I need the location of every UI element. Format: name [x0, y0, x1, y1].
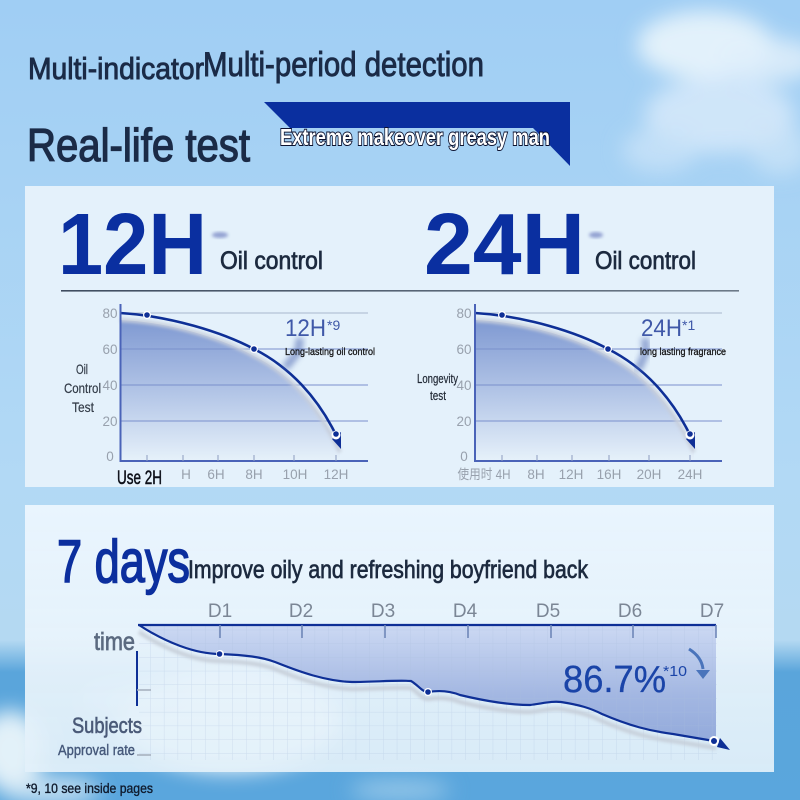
label: longevity test: test: [430, 388, 446, 403]
heading: multi-period detection: Multi-period detection: [203, 46, 484, 84]
chart: oil control test: H: [181, 467, 191, 482]
chart: longevity test: *1: [682, 317, 695, 333]
chart: seven day approval: D4: [453, 601, 478, 622]
stat: 24H oil control: [424, 196, 696, 293]
chart: longevity test: 60: [456, 342, 472, 357]
chart: longevity test: 80: [456, 306, 472, 321]
chart: longevity test: 使用时 4H: [458, 466, 510, 482]
stat: 7 days: 7 days: [57, 528, 190, 595]
subheading: improve oily: Improve oily and refreshing boyfriend back: [188, 556, 588, 584]
banner: extreme makeover: [264, 102, 570, 166]
chart: oil control test: 10H: [283, 467, 307, 482]
chart: oil control test: 40: [102, 378, 118, 393]
chart: longevity test: long lasting fragrance: [640, 346, 726, 358]
label: oil control test: Oil: [76, 361, 88, 377]
stat: 24H oil control: 24H: [424, 196, 585, 293]
stat: 12H oil control: [58, 196, 323, 293]
chart: longevity test: 20: [456, 414, 472, 429]
chart: oil control test: 0: [106, 449, 114, 464]
banner: extreme makeover: Extreme makeover greasy man: [280, 124, 550, 150]
axis label: subjects: Subjects: [72, 713, 142, 738]
chart: oil control test: 12H: [324, 467, 348, 482]
chart: oil control test: 8H: [245, 467, 263, 482]
chart: longevity test: 24H: [641, 315, 682, 342]
stat: 24H oil control: Oil control: [595, 247, 696, 275]
heading: real-life test: Real-life test: [27, 119, 250, 171]
label: oil control test: Test: [72, 399, 94, 415]
chart: seven day approval: D1: [208, 601, 232, 622]
callout: 86.7 percent: 86.7%: [563, 659, 666, 701]
chart: oil control test: Long-lasting oil control: [285, 346, 375, 358]
chart: seven day approval: D3: [371, 601, 395, 622]
label: use 2H: Use 2H: [117, 468, 162, 489]
chart: oil control test: *9: [327, 317, 340, 333]
panel: hour tests: [25, 186, 774, 489]
chart: oil control test: 80: [102, 306, 118, 321]
axis label: approval rate: Approval rate: [58, 742, 135, 759]
chart: longevity test: 12H: [559, 467, 583, 482]
chart: seven day approval: [137, 601, 730, 760]
chart: oil control test: [102, 304, 375, 482]
chart: longevity test: 0: [460, 449, 468, 464]
label: oil control test: [64, 361, 101, 415]
axis label: time: time: [94, 628, 135, 656]
heading: multi-indicator: Multi-indicator: [28, 51, 204, 86]
panel: seven day test: [25, 505, 774, 772]
chart: seven day approval: D6: [618, 601, 642, 622]
chart: longevity test: 20H: [637, 467, 661, 482]
stat: 12H oil control: Oil control: [220, 247, 323, 275]
footnote: *9, 10 see inside pages: [26, 780, 153, 796]
chart: seven day approval: D5: [536, 601, 560, 622]
callout: 86.7 percent: *10: [663, 663, 687, 680]
chart: oil control test: 20: [102, 414, 118, 429]
chart: longevity test: 8H: [527, 467, 545, 482]
label: longevity test: [417, 371, 458, 403]
chart: oil control test: 6H: [207, 467, 225, 482]
chart: seven day approval: D2: [289, 601, 313, 622]
icon: down arrow: [689, 649, 710, 679]
chart: longevity test: 40: [456, 378, 472, 393]
chart: oil control test: 12H: [285, 315, 326, 342]
label: oil control test: Control: [64, 380, 101, 396]
chart: oil control test: 60: [102, 342, 118, 357]
chart: longevity test: [456, 304, 726, 482]
stat: 12H oil control: 12H: [58, 196, 207, 293]
label: longevity test: Longevity: [417, 371, 458, 386]
chart: seven day approval: D7: [700, 601, 724, 622]
chart: longevity test: 24H: [678, 467, 702, 482]
chart: longevity test: 16H: [597, 467, 621, 482]
